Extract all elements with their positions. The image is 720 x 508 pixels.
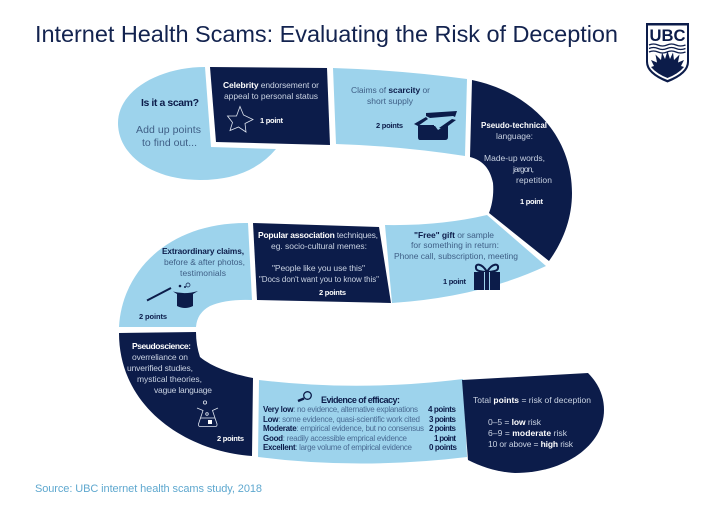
table: evidence levels: 2 points <box>429 424 457 433</box>
panel: evidence of efficacy <box>258 379 467 464</box>
text: free gift: "Free" gift or sample <box>414 230 494 240</box>
text: pseudo-technical: Pseudo-technical <box>481 121 547 130</box>
text: celebrity: Celebrity endorsement or <box>223 80 319 90</box>
text: extraordinary claims: testimonials <box>180 268 226 278</box>
text: pseudo-technical: Made-up words, <box>484 153 545 163</box>
text: popular association: eg. socio-cultural memes: <box>271 241 367 251</box>
text: pseudoscience: vague language <box>154 385 212 395</box>
panel: total points <box>462 373 604 473</box>
text: pseudoscience <box>127 341 244 443</box>
icon: open box <box>414 111 457 140</box>
text: total points: 10 or above = high risk <box>488 439 574 449</box>
text: pseudoscience: unverified studies, <box>127 363 193 373</box>
text: celebrity <box>223 80 319 125</box>
table: evidence levels: 3 points <box>429 415 457 424</box>
text: scarcity: Claims of scarcity or <box>351 85 430 95</box>
text: pseudoscience: 2 points <box>217 434 244 443</box>
text: celebrity: appeal to personal status <box>224 91 318 101</box>
icon: magic wand and hat <box>147 283 198 308</box>
text: popular association <box>258 230 379 297</box>
icon: gift box <box>474 265 500 290</box>
icon: magnifying glass <box>298 392 311 401</box>
text: free gift: 1 point <box>443 277 466 286</box>
text: free gift: Phone call, subscription, meeting <box>394 251 518 261</box>
table: evidence levels: 1 point <box>434 434 456 443</box>
text: pseudo-technical: 1 point <box>520 197 544 206</box>
text: extraordinary claims <box>139 246 245 321</box>
text: free gift <box>394 230 518 286</box>
table: evidence levels: Very low: no evidence, alternative explanations <box>263 405 418 414</box>
table: evidence levels: Moderate: empirical evidence, but no consensus <box>263 424 424 433</box>
text: celebrity: 1 point <box>260 116 284 125</box>
text: popular association: "People like you use this" <box>272 263 365 273</box>
table: evidence levels: Low: some evidence, quasi-scientific work cited <box>263 415 420 424</box>
table: evidence levels: 4 points <box>428 405 457 414</box>
text: extraordinary claims: Extraordinary claims, <box>162 246 244 256</box>
panel: scarcity <box>333 68 467 156</box>
text: pseudoscience: overreliance on <box>132 352 188 362</box>
source note: Source: UBC internet health scams study, 2018 <box>35 483 262 495</box>
text: extraordinary claims: 2 points <box>139 312 167 321</box>
panel: free gift <box>385 215 546 303</box>
text: pseudo-technical: language: <box>496 131 533 141</box>
text: is it a scam: to find out... <box>142 137 197 149</box>
panel: celebrity <box>210 67 330 145</box>
table: evidence levels: Good: readily accessible emprical evidence <box>263 434 408 443</box>
text: scarcity <box>351 85 430 130</box>
text: popular association: 2 points <box>319 288 346 297</box>
text: is it a scam: Add up points <box>136 124 201 136</box>
icon: star <box>228 106 253 132</box>
panel: pseudoscience <box>119 332 253 456</box>
heading: evidence of efficacy: Evidence of efficacy: <box>321 395 400 405</box>
text: popular association: "Docs don't want you to know this" <box>259 275 379 284</box>
table: evidence levels: Excellent: large volume of empirical evidence <box>263 443 413 452</box>
text: is it a scam: Is it a scam? <box>141 97 199 109</box>
panel: is it a scam <box>118 67 276 180</box>
text: total points <box>473 395 591 449</box>
title: Internet Health Scams: Evaluating the Risk of Deception <box>35 21 618 47</box>
text: extraordinary claims: before & after photos, <box>164 257 245 267</box>
text: total points: Total points = risk of deception <box>473 395 591 405</box>
icon: flask <box>197 401 218 426</box>
logo: UBC shield: UBC <box>650 27 686 45</box>
text: pseudo-technical: repetition <box>516 175 552 185</box>
text: pseudo-technical: jargon, <box>512 164 534 174</box>
table: evidence levels <box>263 405 458 452</box>
text: scarcity: 2 points <box>376 121 403 130</box>
panel: extraordinary claims <box>119 223 252 327</box>
text: pseudoscience: mystical theories, <box>137 374 202 384</box>
panel: popular association <box>253 223 391 303</box>
table: evidence levels: 0 points <box>429 443 458 452</box>
text: scarcity: short supply <box>367 96 414 106</box>
text: pseudo-technical <box>481 121 552 206</box>
logo: UBC shield <box>646 23 689 82</box>
text: free gift: for something in return: <box>411 240 499 250</box>
text: pseudoscience: Pseudoscience: <box>132 341 191 351</box>
text: total points: 0–5 = low risk <box>488 417 542 427</box>
text: popular association: Popular association techniques, <box>258 230 378 240</box>
panel: pseudo-technical <box>470 80 572 261</box>
text: total points: 6–9 = moderate risk <box>488 428 568 438</box>
text: is it a scam <box>136 97 201 149</box>
